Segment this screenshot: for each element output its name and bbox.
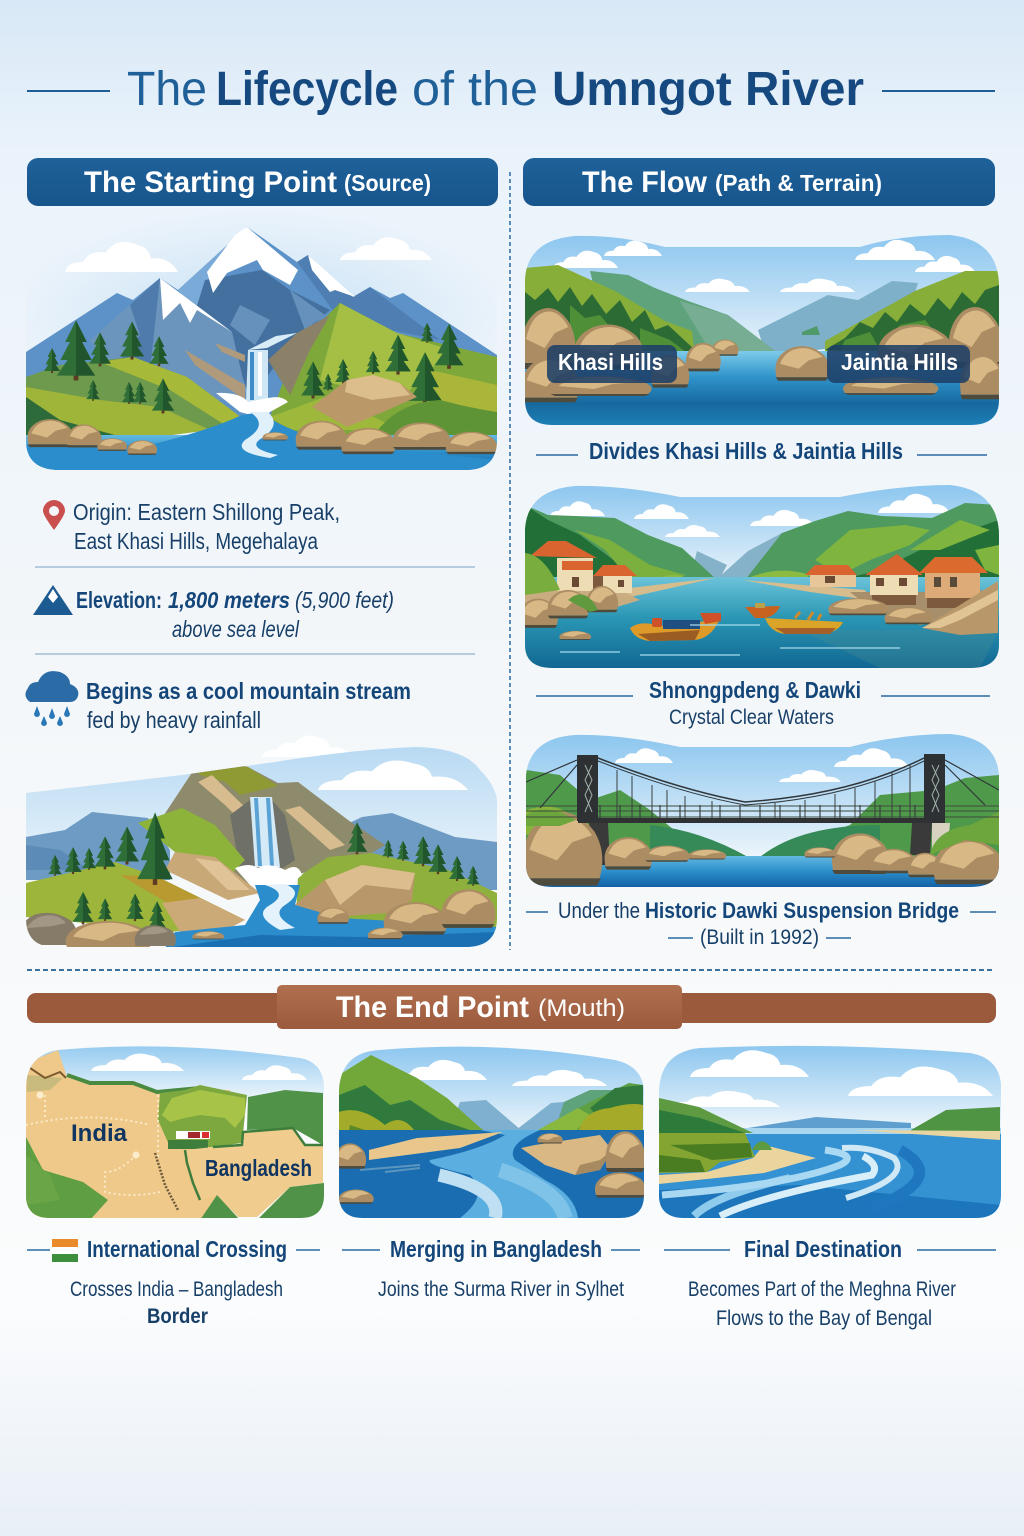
river banks [626,578,866,598]
green lowlands [26,1137,108,1220]
caption: international crossing: Crosses India – Bangladesh [70,1278,283,1301]
caption: final destination [664,1236,996,1330]
illustration: Dawki suspension bridge [523,734,1003,888]
caption: Dawki bridge: Under the [558,898,640,923]
right hills [247,1090,323,1145]
icon: mountain [33,585,73,615]
info: mountain stream: fed by heavy rainfall [87,707,261,733]
right hills [270,303,497,440]
bridge [526,754,999,823]
caption: merging in Bangladesh [342,1236,640,1301]
big rock and bush [312,375,417,427]
info: origin [43,499,340,554]
left shore [659,1145,816,1184]
illustration: India-Bangladesh map [26,1040,324,1220]
caption: final destination: Final Destination [744,1236,902,1262]
background hills [526,770,672,850]
river [525,351,999,426]
boats [630,603,843,641]
caption: Dawki bridge: (Built in 1992) [700,926,819,949]
caption: final destination: Becomes Part of the Meghna River [688,1278,956,1301]
illustration: merging rivers [334,1045,646,1220]
label: Jaintia Hills: Jaintia Hills [841,349,958,375]
info: elevation: Elevation: [76,587,162,613]
info: origin: Origin: Eastern Shillong Peak, [73,499,340,525]
caption: final destination: Flows to the Bay of Bengal [716,1307,932,1330]
caption: divides hills: Divides Khasi Hills & Jaintia Hills [589,438,903,464]
right lime hill with forest [825,271,999,355]
right forest [536,1083,643,1140]
heading: the flow [523,158,995,206]
icon: location pin [43,500,65,530]
heading: the end point [27,985,996,1029]
houses right [805,554,988,608]
info: mountain stream: Begins as a cool mountain stream [86,678,411,704]
heading: the starting point [27,158,498,206]
icon: rain cloud [25,671,78,726]
caption: international crossing: International Crossing [87,1236,287,1262]
label: Khasi Hills [547,345,677,383]
caption: Shnongpdeng and Dawki: Crystal Clear Waters [669,706,834,729]
water [26,435,497,471]
title: of the [412,63,538,116]
label: Jaintia Hills [827,345,970,383]
illustration: mountain source with waterfall [26,227,497,470]
caption: Shnongpdeng and Dawki: Shnongpdeng & Dawki [649,677,861,703]
label: Khasi Hills: Khasi Hills [558,349,663,375]
rocks and bushes [525,553,560,595]
title: Lifecycle [216,63,398,116]
sand [369,1132,503,1160]
river [526,856,999,888]
green slope and rock slope [138,808,245,875]
waterfall [248,333,297,350]
heading: the flow: The Flow [582,166,708,199]
rocks [521,308,575,369]
India land [26,1050,150,1218]
info: elevation: above sea level [172,616,300,642]
caption: international crossing: Border [147,1305,208,1328]
label: India: India [71,1120,128,1147]
river [525,577,999,668]
info: mountain stream [25,671,411,733]
illustration: final destination bay [659,1045,1001,1220]
illustration: Shnongpdeng and Dawki village [519,485,999,668]
left lime hill with forest [525,265,694,347]
left forest [339,1055,486,1160]
icon: border marker [176,1131,210,1139]
info: origin: East Khasi Hills, Megehalaya [74,528,318,554]
info: elevation: 1,800 meters [168,587,290,613]
houses left [530,541,637,593]
distant hills [758,281,918,352]
caption: Dawki bridge [526,898,996,949]
caption: merging in Bangladesh: Merging in Bangladesh [390,1236,602,1262]
left forest [525,508,714,577]
illustration: rocky waterfall and stream [20,736,497,952]
caption: Dawki bridge: Historic Dawki Suspension Bridge [645,898,959,923]
dotted routes [26,1095,160,1195]
left hills [26,357,242,440]
title: Umngot River [552,63,864,116]
right shore [911,1107,1000,1132]
forest block [158,1085,247,1147]
illustration: Khasi and Jaintia hills river [521,235,1005,426]
label: Bangladesh: Bangladesh [205,1155,312,1181]
heading: the end point: The End Point [336,991,529,1024]
rocks [523,812,602,886]
distant hills [450,1090,620,1130]
icon: flag [52,1239,78,1262]
piers [589,823,610,865]
water [165,885,497,948]
info: elevation: (5,900 feet) [295,587,394,613]
caption: Shnongpdeng and Dawki [536,677,990,729]
waterfall [250,797,280,867]
info: elevation [33,585,394,642]
Bangladesh land [185,1128,323,1217]
rocks [521,1135,612,1175]
river [339,1130,644,1220]
heading: the end point: (Mouth) [538,995,625,1022]
sea [659,1128,1001,1220]
caption: merging in Bangladesh: Joins the Surma River in Sylhet [378,1278,624,1301]
heading: the starting point: The Starting Point [84,166,337,199]
right forest [748,503,999,577]
title [27,63,995,116]
title: The [127,63,207,116]
swirls [872,1150,920,1208]
heading: the flow: (Path & Terrain) [715,170,882,196]
caption: international crossing [27,1236,320,1328]
heading: the starting point: (Source) [344,170,431,196]
